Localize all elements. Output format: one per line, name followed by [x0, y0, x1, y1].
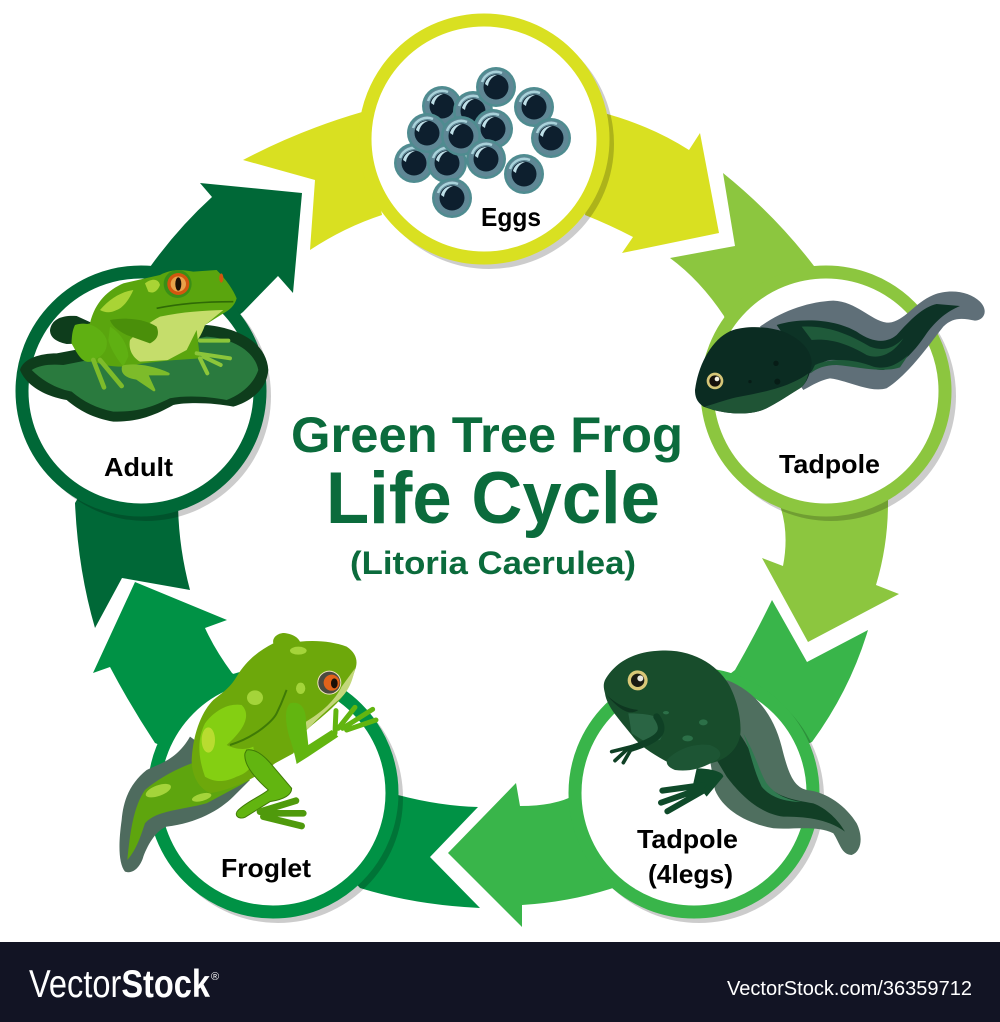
arrow: froglet to adult	[93, 582, 480, 908]
label: Froglet: Froglet	[221, 853, 311, 883]
title line: Life Cycle: Life Cycle	[326, 458, 660, 539]
arrow: four-legged tadpole to froglet	[448, 600, 868, 927]
panel: eggs	[364, 19, 614, 269]
footer logo: VectorStock: VectorStock	[29, 963, 210, 1006]
footer url: VectorStock.com/36359712	[727, 978, 972, 1000]
arrow: tadpole to four-legged tadpole	[670, 173, 899, 642]
label: Tadpole (4legs)	[637, 824, 738, 889]
arrow: eggs to tadpole, left tail	[243, 112, 382, 250]
registered mark: ®	[211, 971, 219, 983]
label: Tadpole: Tadpole	[779, 449, 880, 479]
panel: froglet	[119, 633, 403, 923]
icon: frog eggs	[394, 67, 571, 218]
panel: adult	[20, 270, 271, 521]
label: Tadpole (4legs): (4legs)	[648, 859, 733, 889]
label: Tadpole (4legs): Tadpole	[637, 824, 738, 854]
label: Adult: Adult	[104, 452, 173, 482]
footer bar	[0, 942, 1000, 1022]
panel: tadpole	[695, 271, 985, 521]
arrow: eggs to tadpole, head	[585, 112, 719, 253]
icon: tadpole	[695, 292, 985, 414]
title line: Green Tree Frog: Green Tree Frog	[291, 407, 683, 463]
icon: froglet	[119, 633, 376, 872]
icon: tadpole with legs	[604, 650, 861, 855]
icon: adult frog on lily pad	[20, 270, 268, 422]
title	[291, 407, 683, 581]
arrow: adult to eggs	[75, 183, 302, 628]
label: Eggs: Eggs	[481, 202, 541, 232]
subtitle: Litoria Caerulea: (Litoria Caerulea)	[350, 545, 636, 581]
panel: tadpole with four legs	[574, 650, 861, 923]
